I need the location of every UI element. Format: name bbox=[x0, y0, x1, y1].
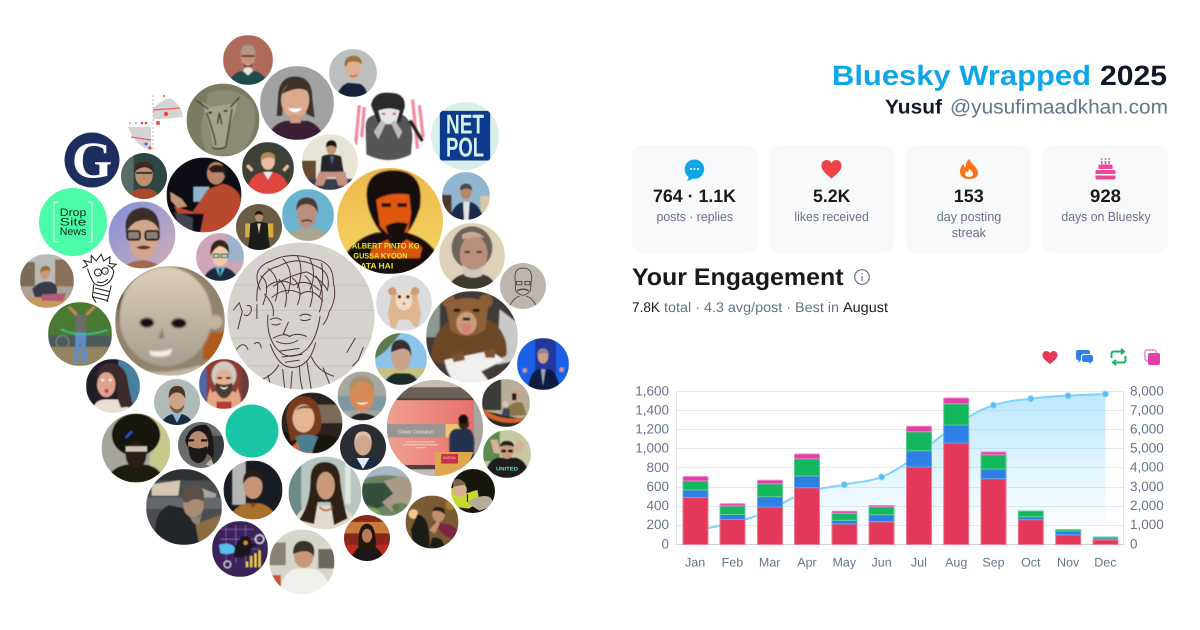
avatar: man with thick glasses on purple bbox=[108, 202, 176, 268]
avatar: robot child face bbox=[115, 266, 228, 376]
avatar: Albert Pinto poster: GUSSA KYOON bbox=[353, 252, 407, 261]
avatar: woman in red restaurant bbox=[344, 515, 390, 561]
avatar: selfie on boat bbox=[482, 379, 530, 427]
title bbox=[832, 60, 1167, 91]
avatar: man with glasses, patterned background bbox=[121, 153, 167, 199]
avatar: man in sunglasses with child on shoulders bbox=[483, 430, 531, 478]
avatar: Drop Site News logo: Drop bbox=[60, 206, 86, 218]
chart legend icons bbox=[1042, 349, 1160, 365]
avatar: Albert Pinto poster: ALBERT PINTO KO bbox=[352, 242, 420, 251]
panel: day posting streak: streak bbox=[952, 225, 986, 240]
panel: days on Bluesky: days on Bluesky bbox=[1061, 209, 1151, 224]
month labels bbox=[685, 556, 1117, 570]
avatar: man on blue background bbox=[282, 189, 334, 241]
avatar: hamster bbox=[376, 275, 432, 331]
avatar: man in white shirt at table bbox=[270, 530, 334, 594]
left axis labels: 1,200 bbox=[635, 422, 669, 436]
month labels: Oct bbox=[1021, 556, 1041, 570]
icon: likes bbox=[1042, 351, 1058, 364]
month labels: Jun bbox=[872, 556, 892, 570]
title: 2025 bbox=[1100, 60, 1167, 91]
avatar: person with hula hoop in park bbox=[48, 302, 112, 366]
left axis labels: 1,600 bbox=[635, 384, 669, 398]
avatar: man with black beard bbox=[178, 422, 225, 468]
avatar: Calvin line drawing bbox=[82, 254, 116, 303]
right axis labels: 8,000 bbox=[1130, 384, 1164, 398]
left axis labels: 600 bbox=[646, 479, 669, 494]
panel: posts and replies: 764 · 1.1K bbox=[653, 186, 736, 206]
right axis labels: 6,000 bbox=[1130, 422, 1164, 436]
avatar: man in navy suit bbox=[154, 379, 200, 425]
avatar: Netpol logo: NET bbox=[446, 109, 484, 139]
avatar: smiling man in sunset light bbox=[338, 372, 386, 420]
left axis labels: 200 bbox=[646, 517, 669, 532]
avatar: surprised woman with dark hair bbox=[86, 359, 140, 413]
avatar: ferocious bear with papers bbox=[426, 291, 518, 383]
panel: day posting streak: day posting bbox=[937, 209, 1001, 224]
avatar: cartoon bearded figure thumbs up bbox=[199, 359, 249, 409]
month labels: May bbox=[832, 556, 857, 570]
panel: posts and replies: posts · replies bbox=[656, 209, 733, 224]
month labels: Sep bbox=[982, 556, 1005, 570]
avatar: afro portrait bbox=[102, 414, 170, 482]
right axis labels: 0 bbox=[1130, 536, 1138, 552]
chart: monthly engagement bbox=[635, 384, 1164, 570]
avatar: woman with auburn hair and scarf bbox=[282, 392, 342, 454]
icon: info bbox=[855, 270, 869, 284]
avatar: Albert Pinto poster: ATA HAI bbox=[360, 262, 393, 271]
avatar: pencil portrait bbox=[500, 263, 546, 309]
avatar: speaker on blue stage bbox=[517, 338, 569, 390]
right axis labels: 1,000 bbox=[1130, 517, 1164, 532]
left axis labels bbox=[635, 384, 669, 552]
right axis labels: 3,000 bbox=[1130, 479, 1164, 494]
avatar: Netpol logo: POL bbox=[446, 132, 484, 163]
icon: replies bbox=[1076, 350, 1093, 364]
month labels: Aug bbox=[945, 556, 967, 570]
avatar: person in hi-vis jacket bbox=[451, 469, 495, 513]
avatar: woman with long dark hair bbox=[288, 456, 362, 530]
avatar: man thinking with maroon shirt bbox=[406, 496, 458, 548]
avatar: young man under trees bbox=[375, 333, 427, 385]
avatar: Netpol logo bbox=[431, 102, 499, 170]
engagement summary: 7.8K bbox=[632, 299, 661, 315]
heading: Your Engagement: Your Engagement bbox=[632, 264, 844, 291]
avatar: Drop Site News logo bbox=[39, 188, 107, 256]
icon: flame bbox=[960, 159, 978, 179]
avatar: man in suit on yellow chair bbox=[236, 204, 282, 250]
avatar: woman in red cardigan bbox=[242, 142, 294, 194]
avatar: neon bird illustration bbox=[212, 521, 268, 577]
avatar: rocky landscape bbox=[362, 466, 412, 516]
avatar: pen sketch self portrait bbox=[228, 242, 374, 390]
right axis labels: 2,000 bbox=[1130, 498, 1164, 513]
right axis labels: 4,000 bbox=[1130, 460, 1164, 474]
avatar: hooded anime figure bbox=[354, 92, 426, 161]
panel: likes received: likes received bbox=[794, 209, 869, 224]
right axis labels: 7,000 bbox=[1130, 402, 1164, 418]
icon: speech bubble bbox=[685, 159, 704, 181]
month labels: Dec bbox=[1094, 556, 1117, 570]
panel: day posting streak: 153 bbox=[954, 186, 984, 206]
left axis labels: 1,000 bbox=[635, 440, 669, 456]
avatar: solid teal bbox=[226, 404, 278, 458]
right axis labels bbox=[1130, 384, 1164, 552]
panel: days on Bluesky bbox=[1043, 145, 1168, 253]
icon: birthday cake bbox=[1096, 158, 1116, 180]
avatar: Climate Colonialism lecture: BOSTON bbox=[443, 457, 456, 460]
right axis labels: 5,000 bbox=[1130, 440, 1164, 456]
icon: reposts bbox=[1112, 349, 1126, 365]
panel: likes received: 5.2K bbox=[813, 186, 850, 206]
left axis labels: 800 bbox=[646, 460, 669, 475]
panel: likes received bbox=[769, 145, 894, 253]
panel: days on Bluesky: 928 bbox=[1090, 186, 1121, 206]
avatar: Climate Colonialism lecture: Climate Colonialism bbox=[398, 429, 434, 435]
month labels: Nov bbox=[1057, 556, 1080, 570]
avatar: Climate Colonialism lecture bbox=[387, 380, 483, 476]
avatar: scatter chart wedges bbox=[128, 95, 183, 151]
left axis labels: 1,400 bbox=[635, 402, 669, 418]
avatar: man hunched over laptop bbox=[146, 469, 222, 545]
engagement summary bbox=[632, 299, 888, 315]
avatar: man in blazer under sky bbox=[442, 172, 490, 220]
icon: quotes bbox=[1145, 350, 1160, 365]
left axis labels: 400 bbox=[646, 498, 669, 513]
stacked bars bbox=[683, 398, 1118, 544]
avatar: bald man in suit bbox=[340, 424, 386, 470]
avatar: man on bench in street bbox=[20, 254, 74, 308]
left axis labels: 0 bbox=[661, 536, 669, 552]
avatar: rhino sketch bbox=[186, 84, 260, 156]
month labels: Jul bbox=[911, 556, 927, 570]
panel: day posting streak bbox=[906, 145, 1031, 253]
avatar: Albert Pinto poster bbox=[337, 168, 443, 274]
month labels: Apr bbox=[797, 556, 817, 570]
user name and handle: @yusufimaadkhan.com bbox=[950, 96, 1168, 118]
avatar: Drop Site News logo: News bbox=[60, 225, 86, 237]
engagement summary: August bbox=[843, 299, 888, 315]
user name and handle: Yusuf bbox=[885, 96, 942, 118]
avatar: man in red sweater at computer bbox=[166, 158, 242, 232]
icon: heart bbox=[822, 160, 842, 178]
month labels: Mar bbox=[759, 556, 780, 570]
title: Bluesky Wrapped bbox=[832, 60, 1091, 91]
avatar: curly-haired man with grey beard bbox=[439, 223, 505, 289]
cumulative area and line bbox=[695, 391, 1108, 544]
avatar: Guardian logo: G bbox=[72, 131, 112, 189]
avatar: Drop Site News logo: Site bbox=[60, 216, 86, 228]
avatar: man in brown shirt bbox=[224, 460, 282, 520]
avatar: cartoon man with glasses bbox=[196, 233, 244, 281]
avatar: young man in navy bbox=[329, 49, 377, 97]
avatar: man in sunglasses with child on shoulders: UNITED bbox=[496, 466, 518, 472]
panel: posts and replies bbox=[632, 145, 757, 253]
avatar cluster bbox=[20, 35, 569, 594]
avatar: smiling woman bbox=[260, 66, 334, 140]
month labels: Jan bbox=[685, 556, 705, 570]
engagement summary: total · 4.3 avg/post · Best in bbox=[664, 299, 839, 315]
avatar: seated man in dark suit bbox=[302, 134, 358, 190]
month labels: Feb bbox=[722, 556, 743, 570]
avatar: bald man with glasses bbox=[223, 35, 273, 85]
